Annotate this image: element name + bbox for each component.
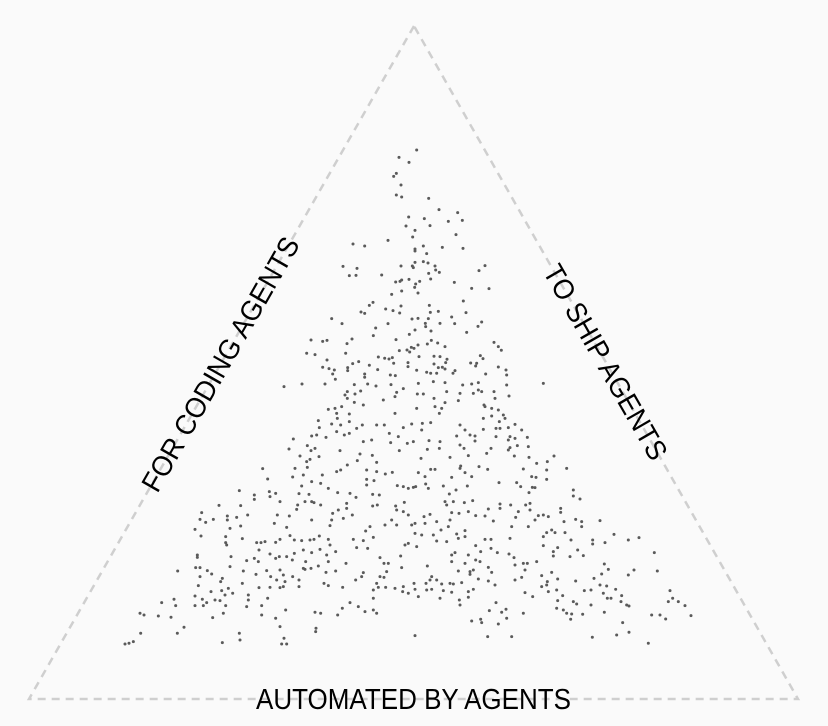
scatter points — [125, 150, 691, 644]
bottom axis label: AUTOMATED BY AGENTS — [256, 684, 571, 716]
left axis label: FOR CODING AGENTS — [136, 232, 307, 497]
right axis label: TO SHIP AGENTS — [536, 259, 673, 466]
